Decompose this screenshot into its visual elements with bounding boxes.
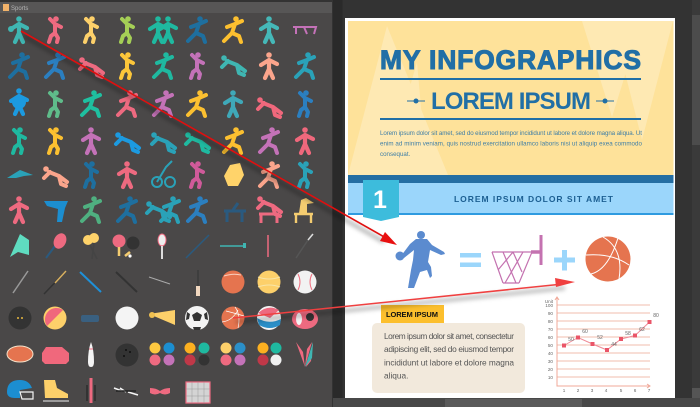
icons: athletes row 2 (10, 52, 314, 78)
icons: sticks and balls row 8 (13, 270, 316, 296)
icons: balls row 9 (8, 306, 318, 330)
icons: gear row 11 (7, 378, 210, 403)
panel: infographic page (345, 18, 675, 398)
line chart: 80 (653, 313, 659, 319)
icon: equals (460, 253, 481, 267)
line chart: 30 (548, 359, 553, 364)
icons: equipment row 7 (10, 231, 313, 259)
line chart: 10 (548, 375, 553, 380)
line chart: 50 (548, 343, 553, 348)
icons: athletes row 1 (8, 16, 316, 42)
line chart: 5 (620, 388, 623, 393)
line chart: 1 (563, 388, 566, 393)
intro paragraph: consequat. (380, 151, 411, 158)
bottom scrollbar (333, 398, 700, 407)
line chart: 100 (545, 303, 553, 308)
ruler strip (333, 0, 342, 407)
section heading: LOREM IPSUM DOLOR SIT AMET (454, 194, 614, 204)
icons: athletes row 5 (7, 161, 311, 187)
panel: sports icon library (0, 2, 332, 407)
line chart: 52 (597, 335, 603, 341)
line chart: 40 (548, 351, 553, 356)
line chart: 44 (611, 342, 617, 348)
callout tag (381, 305, 444, 323)
line chart: 62 (639, 327, 645, 333)
title: MY INFOGRAPHICS (380, 45, 641, 75)
line chart: Unit (545, 299, 554, 304)
line chart: 60 (548, 335, 553, 340)
icons: athletes row 6 (11, 196, 314, 223)
icons: athletes row 3 (11, 88, 311, 117)
line chart: 60 (582, 329, 588, 335)
intro paragraph: enim ad minim veniam, quis nostrud exercitation ullamco laboris nisi ut aliquip exea commodo (380, 140, 643, 148)
line chart: 90 (548, 311, 553, 316)
line chart: 58 (625, 331, 631, 337)
callout tag: LOREM IPSUM (386, 310, 438, 319)
line chart (545, 297, 659, 393)
icon: basketball player (396, 231, 445, 288)
line chart: 50 (568, 337, 574, 343)
right scrollbar (692, 0, 700, 398)
callout text box: Lorem ipsum dolor sit amet, consectetur (384, 331, 514, 341)
line chart: 20 (548, 367, 553, 372)
callout text box: aliqua. (384, 370, 408, 380)
line chart: 6 (634, 388, 637, 393)
line chart: 4 (605, 388, 608, 393)
callout text box: adipiscing elit, sed do eiusmod tempor (384, 344, 514, 354)
line chart: 3 (591, 388, 594, 393)
section banner (348, 175, 674, 221)
ribbon number (363, 180, 399, 221)
icons: athletes row 4 (13, 127, 313, 153)
arrow: player icon to infographic (21, 31, 397, 245)
ribbon number: 1 (373, 186, 387, 214)
icon: plus (554, 250, 575, 270)
header background (348, 21, 674, 175)
arrow: basketball icon to infographic (233, 278, 575, 322)
intro paragraph (380, 130, 643, 158)
subtitle with rules (380, 78, 641, 120)
callout text box: incididunt ut labore et dolore magna (384, 358, 514, 368)
callout text box (372, 323, 525, 393)
intro paragraph: Lorem ipsum dolor sit amet, sed do eiusmod tempor incididunt ut labore et dolore magna aliqua. Ut (380, 130, 642, 137)
panel title: Sports (3, 4, 28, 12)
panel title: Sports: Sports (11, 6, 28, 12)
line chart: 70 (548, 327, 553, 332)
icon: basketball hoop (492, 235, 541, 283)
icons: bowling and billiards row 10 (7, 342, 313, 367)
line chart: 7 (648, 388, 651, 393)
line chart: 2 (577, 388, 580, 393)
subtitle with rules: LOREM IPSUM (431, 88, 591, 115)
icon: basketball (586, 236, 630, 282)
line chart: 80 (548, 319, 553, 324)
